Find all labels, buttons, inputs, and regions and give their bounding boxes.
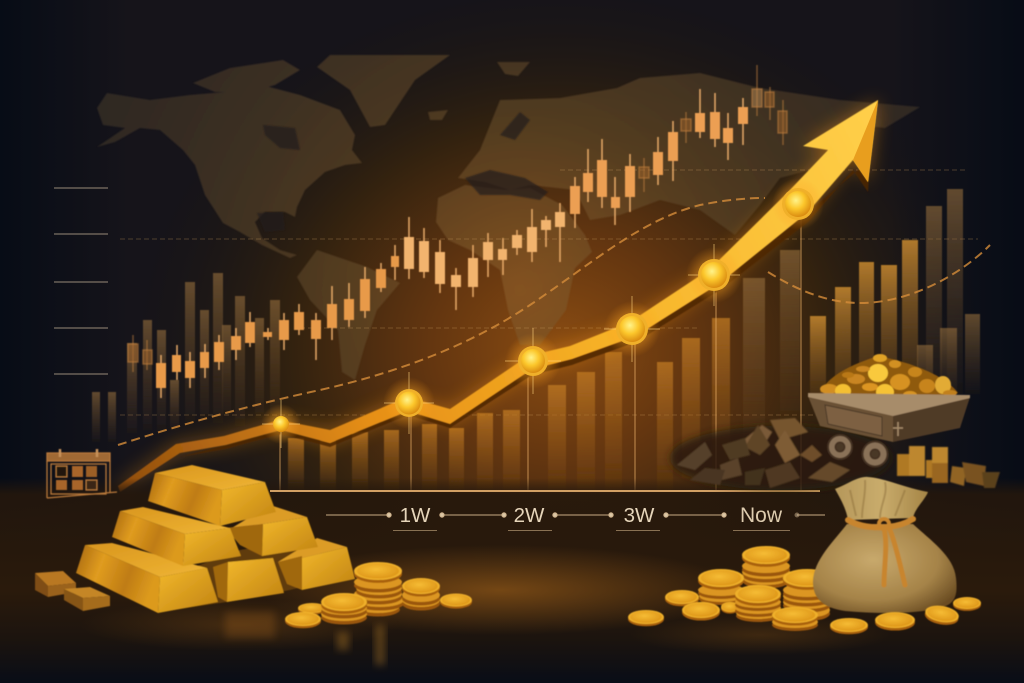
bar chart: central and right volume bars — [288, 189, 980, 490]
coins left — [285, 562, 472, 628]
cube: right — [64, 587, 110, 611]
coin stack middle — [735, 585, 781, 622]
candlestick chart — [128, 65, 787, 398]
flat coins — [628, 590, 739, 626]
gold heap — [820, 354, 958, 408]
y-axis tick marks — [54, 188, 108, 374]
small gold blocks behind bag — [897, 446, 1000, 488]
bar: bottom left — [76, 543, 218, 613]
point: 3W — [604, 296, 660, 362]
flat coin right — [440, 594, 472, 609]
rising arrow — [118, 100, 878, 492]
point: latest — [772, 178, 824, 230]
point: 2W — [505, 328, 561, 394]
money bag — [813, 477, 957, 613]
horizontal dashed grid lines — [120, 170, 978, 415]
bar: upper right — [225, 505, 318, 556]
bag body — [813, 524, 957, 613]
coin stack back — [742, 546, 790, 588]
coin stack front — [321, 593, 367, 624]
label: 2W: 2W — [514, 504, 545, 527]
map seas overlay — [257, 112, 548, 232]
coins by the bag — [830, 597, 981, 634]
bar: lower middle — [213, 558, 284, 602]
point: start — [261, 400, 301, 448]
coin stack front — [772, 607, 818, 631]
bar: middle — [112, 507, 241, 566]
stack shadow filler — [160, 540, 350, 612]
bag ruffle — [835, 477, 928, 520]
dashed trend curves — [118, 198, 990, 445]
label: 1W: 1W — [400, 504, 431, 527]
coin stack small right — [402, 578, 440, 610]
bar: top — [148, 465, 276, 526]
coin stack right — [783, 569, 831, 620]
bar: lower right — [278, 538, 355, 590]
flat coin front — [285, 612, 321, 628]
rock pile — [670, 418, 890, 490]
label: Now: Now — [740, 504, 783, 527]
mine cart with gold — [808, 354, 970, 466]
icon: calendar — [47, 449, 117, 498]
timeline labels — [326, 504, 825, 530]
coin stack tall — [354, 562, 404, 616]
cube: left — [35, 571, 76, 597]
bar chart: left volume bars — [92, 273, 280, 442]
coin stack left — [698, 569, 744, 605]
point: Now — [686, 244, 742, 306]
coins right — [628, 546, 831, 631]
cart wheels — [828, 435, 888, 466]
world map — [97, 55, 920, 380]
flat coin — [298, 603, 326, 615]
gold bars stack — [35, 465, 355, 613]
chart data points — [261, 178, 824, 448]
chart vertical guide lines — [280, 220, 801, 491]
timeline axis line — [270, 490, 820, 492]
point: 1W — [383, 372, 435, 434]
cart body — [808, 396, 893, 442]
bag rope — [848, 519, 913, 585]
timeline connectors — [326, 513, 825, 530]
floor — [0, 478, 1024, 683]
label: 3W: 3W — [624, 504, 655, 527]
